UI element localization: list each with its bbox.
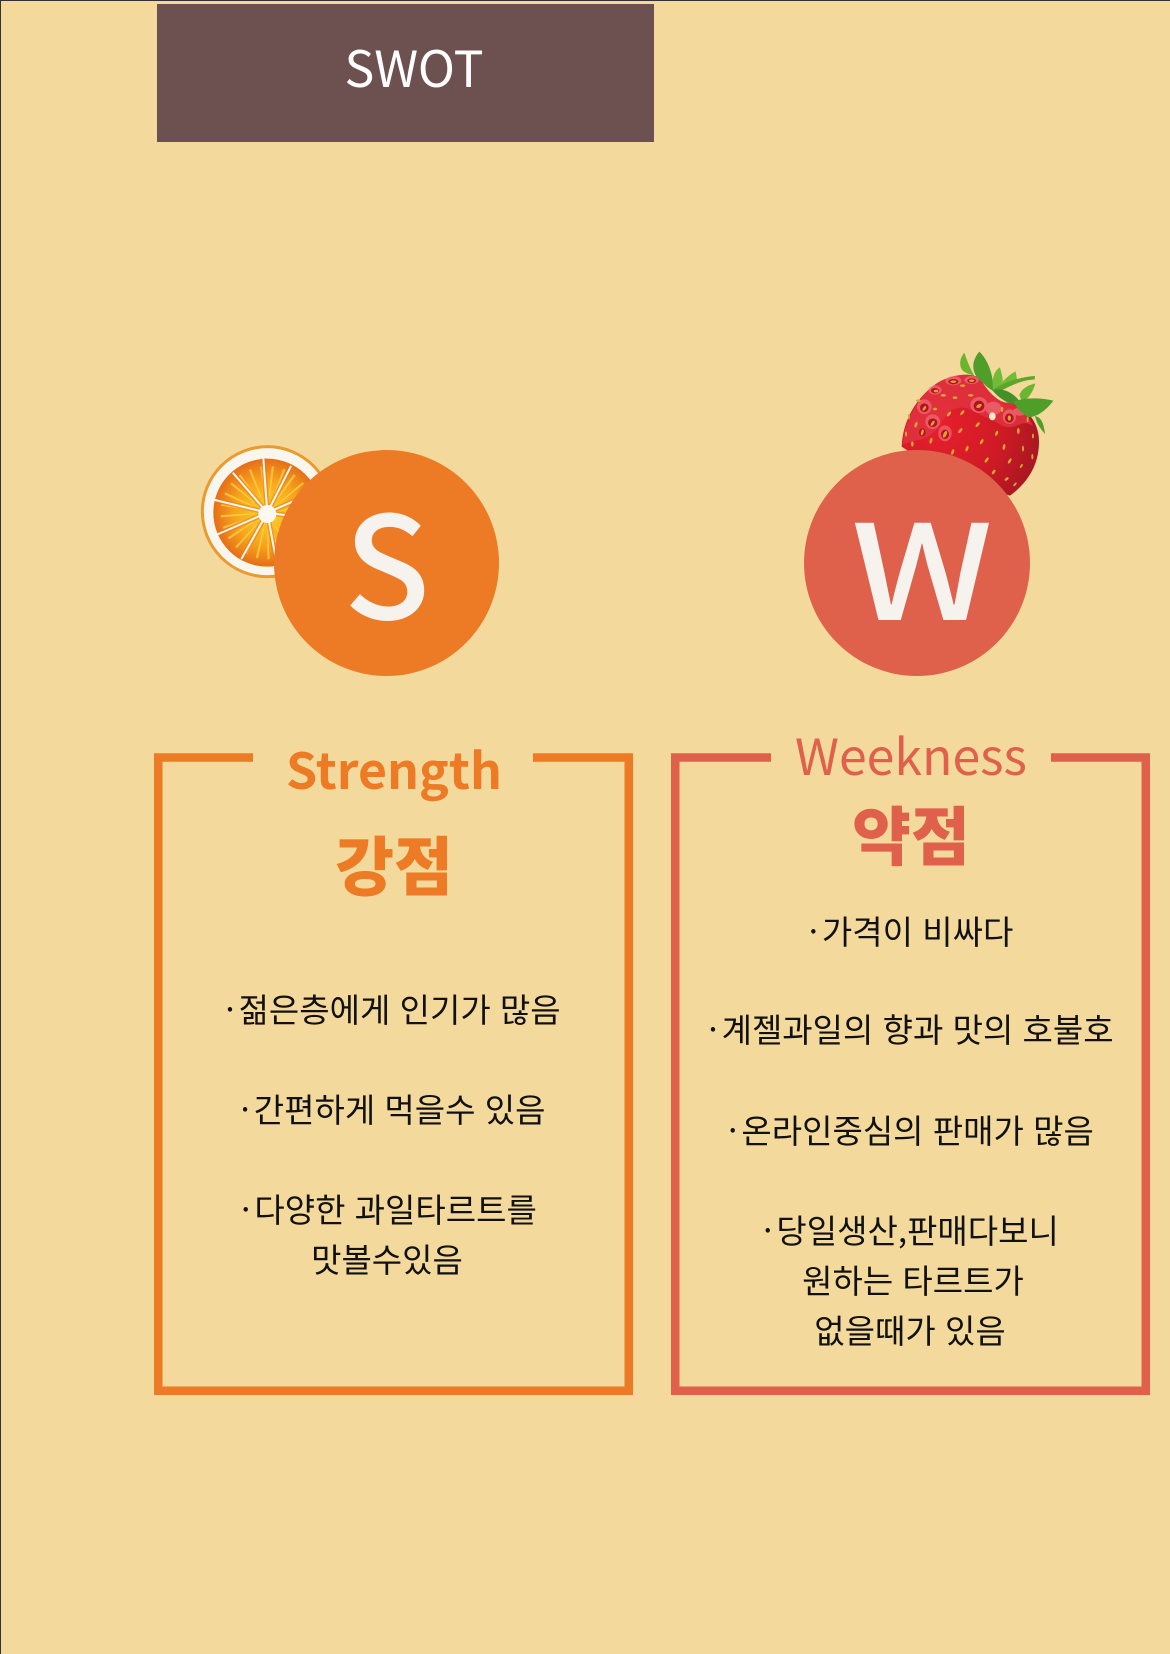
letter W: W <box>851 468 993 659</box>
bullet: expensive: ·가격이 비싸다 <box>809 906 1013 954</box>
bullet: seasonal fruit preference: ·계젤과일의 향과 맛의 호불호 <box>708 1004 1114 1052</box>
icon: orange slice <box>200 445 320 578</box>
bullet: various fruit tarts <box>241 1184 537 1282</box>
bullet: same-day production: ·당일생산,판매다보니 <box>763 1205 1059 1253</box>
W badge <box>804 450 1030 676</box>
icon: strawberry <box>902 352 1054 496</box>
bullet: various fruit tarts: ·다양한 과일타르트를 <box>241 1184 537 1232</box>
heading: Weekness: Weekness <box>795 718 1027 790</box>
panel: strength <box>154 732 633 1395</box>
panel frame: strength <box>154 753 633 1395</box>
bullet: easy to eat: ·간편하게 먹을수 있음 <box>241 1084 545 1132</box>
bullet: same-day production: 없을때가 있음 <box>814 1305 1006 1353</box>
heading: Strength: Strength <box>286 732 502 804</box>
bullet: popular with young people: ·젊은층에게 인기가 많음 <box>225 984 561 1032</box>
bullet: various fruit tarts: 맛볼수있음 <box>311 1234 463 1282</box>
S badge <box>274 450 499 676</box>
title text: SWOT <box>344 30 484 102</box>
letter S: S <box>344 454 430 660</box>
heading: 약점: 약점 <box>852 787 970 879</box>
heading: 강점: 강점 <box>335 817 453 909</box>
panel frame: weakness <box>671 753 1150 1395</box>
title banner: SWOT <box>157 4 654 142</box>
bullet: online sales: ·온라인중심의 판매가 많음 <box>728 1105 1094 1153</box>
bullet: same-day production: 원하는 타르트가 <box>802 1255 1024 1303</box>
bullet: same-day production <box>763 1205 1059 1353</box>
panel: weakness <box>671 718 1150 1395</box>
